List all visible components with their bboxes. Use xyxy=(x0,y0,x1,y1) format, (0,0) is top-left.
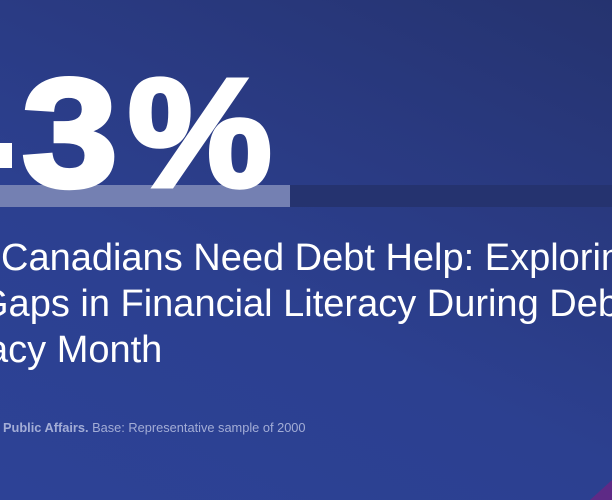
title xyxy=(0,237,612,371)
percent sign: % xyxy=(128,47,272,219)
digit 3: 3 xyxy=(22,47,118,219)
digit 4 crossbar stub xyxy=(0,143,12,168)
progress bar track xyxy=(290,185,612,207)
corner accent xyxy=(590,480,612,500)
big statistic xyxy=(0,47,272,219)
source note: Public Affairs. Base: Representative sample of 2000 xyxy=(3,420,306,435)
progress bar fill xyxy=(0,185,290,207)
